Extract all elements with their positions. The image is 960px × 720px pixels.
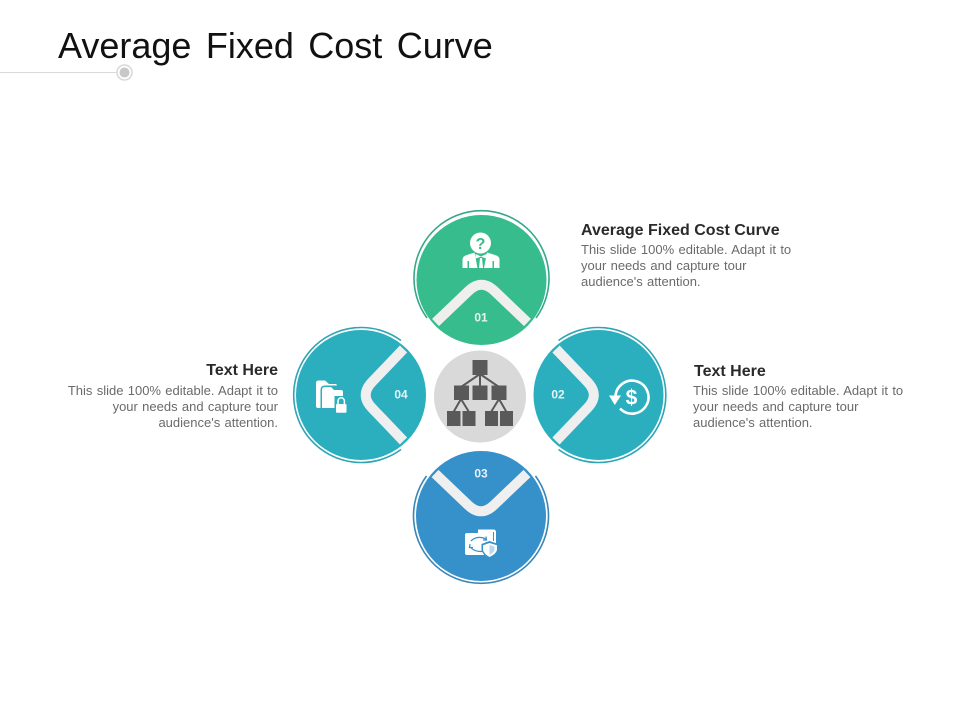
text block 04: Text Here: [206, 362, 278, 378]
text block 02: your needs and capture tour: [693, 399, 858, 414]
center circle with org chart icon: [434, 350, 526, 442]
text block 04: your needs and capture tour: [113, 398, 278, 414]
icon: folder with lock: [316, 380, 348, 414]
icon: person with question mark: ?: [476, 236, 485, 253]
text block 02: Text Here: [694, 362, 766, 380]
icon: dollar with return arrow: [609, 381, 648, 414]
number 01: 01: [474, 310, 488, 324]
number 04: 04: [394, 388, 408, 402]
text block 02: [693, 362, 903, 430]
text block 02: This slide 100% editable. Adapt it to: [693, 383, 903, 398]
text block 01: your needs and capture tour: [581, 258, 746, 273]
text block 04: [68, 362, 278, 430]
text block 01: [581, 222, 791, 289]
title rule with node: [0, 65, 132, 80]
title: Average Fixed Cost Curve: [58, 25, 493, 66]
segment 04: teal circle: [294, 328, 426, 462]
text block 01: Average Fixed Cost Curve: [581, 222, 780, 238]
text block 04: This slide 100% editable. Adapt it to: [68, 382, 278, 398]
text block 01: audience's attention.: [581, 274, 701, 289]
text block 04: audience's attention.: [158, 414, 278, 430]
segment 03: blue circle: [414, 451, 548, 583]
text block 01: This slide 100% editable. Adapt it to: [581, 242, 791, 257]
icon: folder with shield: [465, 530, 498, 559]
text block 02: audience's attention.: [693, 415, 813, 430]
segment 02: teal circle: [534, 328, 666, 462]
segment 01: green circle: [414, 211, 549, 345]
icon: dollar with return arrow: $: [626, 386, 638, 410]
number 03: 03: [474, 466, 488, 480]
number 02: 02: [551, 388, 565, 402]
icon: person with question mark: [462, 232, 500, 268]
